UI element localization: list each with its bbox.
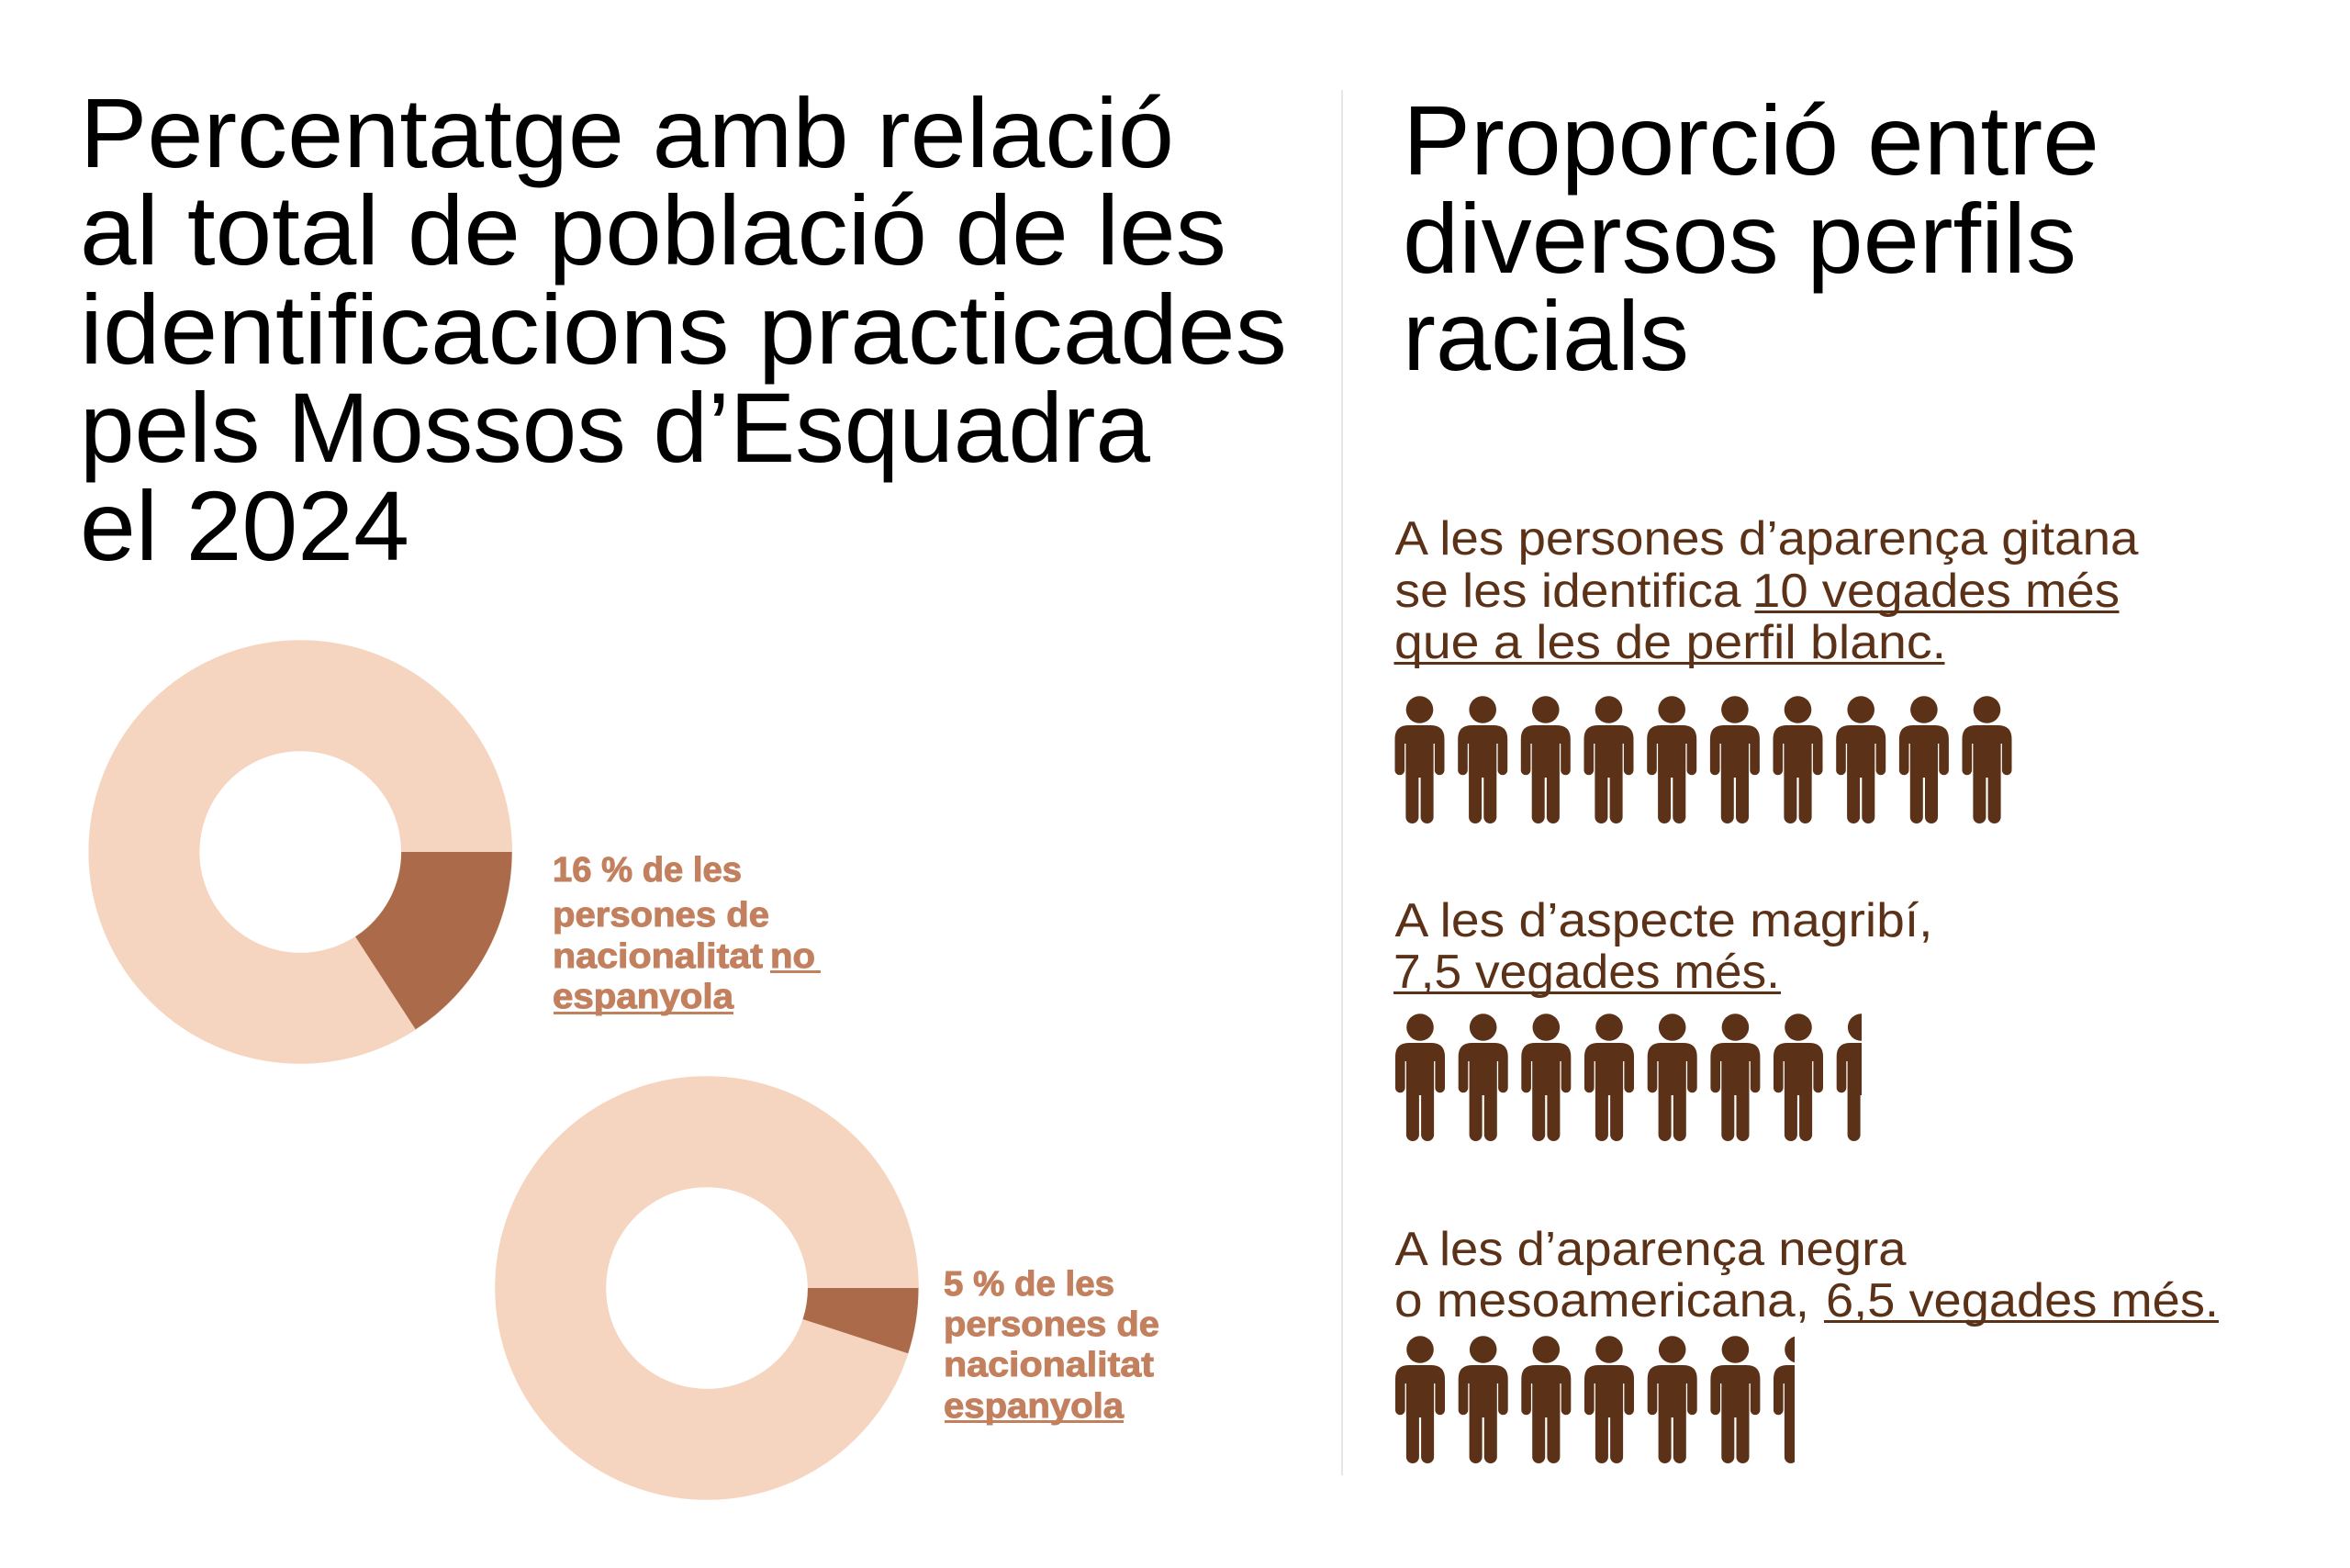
label: 5% Spanish: nacionalitat <box>944 1346 1154 1384</box>
text block: Roma appearance, 10 times: que a les de perfil blanc. <box>1394 616 1946 669</box>
title: right heading: diversos perfils <box>1403 183 2076 294</box>
panel: percentage of identifications <box>80 77 1287 1444</box>
title: left heading: pels Mossos d’Esquadra <box>80 372 1151 483</box>
text block: Black or Mesoamerican appearance, 6.5 times: o mesoamericana, <box>1394 1274 1809 1327</box>
title: left heading: Percentatge amb relació <box>80 77 1174 188</box>
pictogram: 6.5 persons <box>1395 1336 1823 1463</box>
text block: Black or Mesoamerican appearance, 6.5 times: A les d’aparença negra <box>1395 1223 1907 1276</box>
label: 5% Spanish: persones de <box>944 1305 1159 1344</box>
text block: Black or Mesoamerican appearance, 6.5 times: 6,5 vegades més. <box>1826 1274 2219 1327</box>
title: right heading: racials <box>1403 280 1689 391</box>
text block: Maghrebi appearance, 7.5 times: 7,5 vegades més. <box>1393 946 1780 999</box>
label: 16% non-Spanish <box>553 851 821 1016</box>
text block: Roma appearance, 10 times: se les identifica <box>1395 565 1741 618</box>
label: 5% Spanish: espanyola <box>944 1387 1125 1426</box>
title: right heading <box>1403 84 2099 391</box>
label: 16% non-Spanish: nacionalitat <box>553 937 763 976</box>
text block: Maghrebi appearance, 7.5 times <box>1393 894 1933 999</box>
label: 16% non-Spanish: no <box>770 937 815 976</box>
label: 5% Spanish <box>944 1265 1159 1426</box>
title: left heading <box>80 77 1287 581</box>
text block: Black or Mesoamerican appearance, 6.5 times <box>1394 1223 2219 1327</box>
label: 16% non-Spanish: espanyola <box>553 978 734 1016</box>
donut chart: 16% non-Spanish nationality <box>144 696 512 1029</box>
pictogram: 10 persons <box>1395 696 2012 823</box>
text block: Maghrebi appearance, 7.5 times: A les d’aspecte magribí, <box>1395 894 1933 947</box>
pictogram: 7.5 persons <box>1395 1014 1886 1141</box>
title: right heading: Proporció entre <box>1403 84 2099 196</box>
label: 16% non-Spanish: 16 % de les <box>553 851 742 890</box>
panel: proportion between racial profiles <box>1393 84 2219 1463</box>
title: left heading: identificacions practicades <box>80 274 1287 385</box>
label: 16% non-Spanish: persones de <box>553 896 769 935</box>
title: left heading: el 2024 <box>80 470 409 581</box>
text block: Roma appearance, 10 times <box>1393 512 2139 669</box>
title: left heading: al total de població de les <box>80 174 1226 286</box>
donut chart: 5% Spanish nationality <box>551 1132 918 1444</box>
label: 5% Spanish: 5 % de les <box>944 1265 1114 1304</box>
text block: Roma appearance, 10 times: A les persones d’aparença gitana <box>1395 512 2139 566</box>
text block: Roma appearance, 10 times: 10 vegades més <box>1752 565 2120 618</box>
